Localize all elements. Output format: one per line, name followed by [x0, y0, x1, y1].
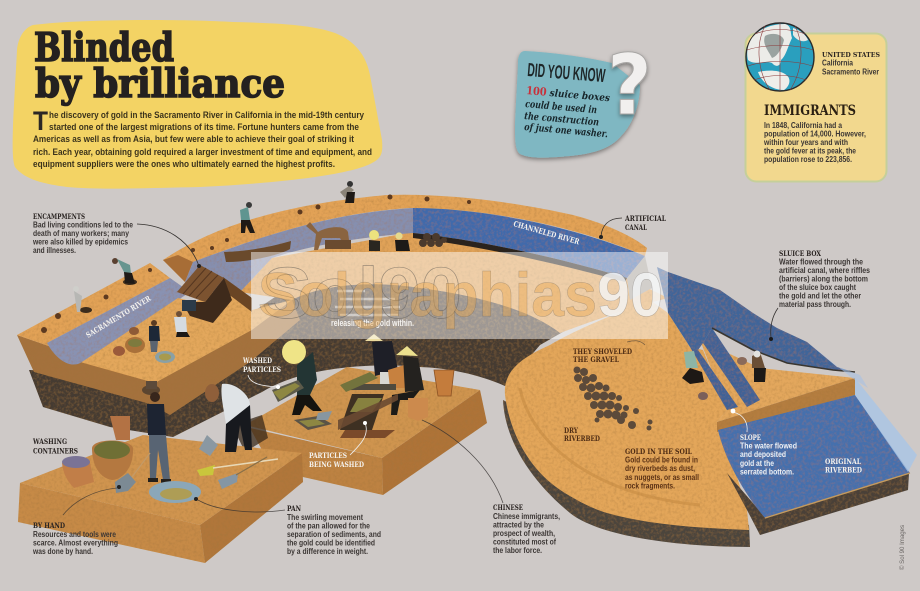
chute two	[690, 347, 738, 410]
canal inner wall	[413, 233, 627, 282]
label: washing containers	[32, 437, 78, 456]
dry riverbed: dark rim	[503, 400, 750, 547]
label: sluice box	[769, 249, 870, 341]
figure: seated Chinese man and stool	[365, 334, 428, 421]
clay pot	[92, 440, 133, 480]
front left block	[18, 435, 303, 563]
pale water wall	[855, 378, 917, 472]
fact text: 100 sluice boxes	[526, 84, 611, 104]
back bank	[163, 195, 647, 282]
label: by hand: scarce. Almost everything	[33, 538, 118, 548]
title: Blinded	[34, 25, 174, 71]
label: sluice box: Water flowed through the	[779, 256, 863, 266]
intro text: Americas as well as from Asia, but few were able to achieve their goal of striking it	[33, 134, 355, 145]
yellow shovel	[197, 465, 215, 476]
scene: hut	[177, 265, 232, 323]
label: Chinese: constituted most of	[493, 536, 556, 546]
label: dry riverbed	[564, 426, 600, 443]
label: encampments	[32, 212, 201, 268]
body text: population of 14,000. However,	[764, 128, 866, 138]
center block	[245, 367, 487, 495]
label: Chinese: prospect of wealth,	[493, 528, 555, 538]
filled logotype: Solgraphias90	[258, 261, 663, 330]
label: slope: gold at the	[740, 458, 774, 468]
label: artificial canal: CANAL	[625, 223, 648, 232]
label: dry riverbed: DRY	[564, 426, 579, 435]
original riverbed water	[718, 395, 910, 518]
label: sluice box: (barriers) along the bottom	[779, 274, 868, 284]
panel: title and introduction	[13, 20, 382, 189]
shovel head	[115, 473, 136, 493]
label: gold in the soil: rock fragments.	[625, 480, 675, 490]
label: slope: serrated bottom.	[740, 466, 794, 476]
chute one	[703, 328, 760, 407]
label: washing containers: CONTAINERS	[33, 446, 78, 456]
label: they shoveled the gravel: THE GRAVEL	[573, 355, 620, 364]
label: pan	[194, 497, 381, 556]
worker at lower terrace	[149, 311, 190, 352]
label: pan: of the pan allowed for the	[287, 520, 370, 530]
label: by hand	[32, 485, 121, 556]
bank front edge	[163, 255, 193, 282]
heading: DID YOU KNOW	[527, 60, 606, 87]
label: washed particles: PARTICLES	[243, 365, 281, 374]
bank stones	[41, 194, 471, 333]
figure: wooden bucket	[434, 370, 454, 396]
label: Sacramento River: SACRAMENTO RIVER	[84, 294, 153, 340]
dry riverbed: top surface	[505, 300, 749, 530]
fact text: could be used in	[525, 99, 597, 116]
scene: workers on upper arc	[41, 181, 471, 333]
label: particles being washed	[309, 421, 367, 469]
label: gold in the soil: GOLD IN THE SOIL	[625, 447, 693, 456]
location labels	[822, 51, 880, 76]
scene: horse	[306, 222, 351, 250]
label: by hand: BY HAND	[33, 521, 65, 530]
location labels: Sacramento River	[822, 66, 880, 76]
worker with shovel far left	[73, 286, 92, 313]
label: encampments: ENCAMPMENTS	[33, 212, 85, 221]
intro text: rich. Each year, obtaining gold required a larger investment of time and equipment, and	[33, 147, 372, 158]
canal end wedge	[627, 256, 652, 300]
label: they shoveled the gravel: THEY SHOVELED	[573, 347, 632, 356]
icon: globe	[746, 23, 814, 91]
yellow title blob	[13, 20, 382, 189]
label: channeled river: CHANNELED RIVER	[512, 219, 581, 246]
sluice box	[657, 267, 853, 410]
worker bending	[112, 258, 137, 285]
label: Chinese: CHINESE	[493, 503, 523, 512]
panel: immigrants	[746, 23, 886, 182]
washing sluice	[338, 372, 398, 438]
label: artificial canal	[599, 214, 667, 239]
bucket	[62, 457, 94, 488]
intro text: T	[33, 106, 48, 136]
label: Chinese	[422, 420, 560, 555]
soil: brown upper stratum	[17, 300, 300, 415]
label: sluice box: of the sluice box caught	[779, 282, 856, 292]
dry riverbed: inner terrace line	[520, 388, 700, 505]
rock pile by canal	[419, 233, 447, 247]
label: gold in the soil: dry riverbeds as dust,	[625, 463, 695, 473]
intro text: started one of the largest migrations of its time. Fortune hunters came from the	[49, 122, 359, 133]
fact text: the construction	[524, 111, 599, 129]
rock pile	[574, 366, 652, 430]
figure: workers at sluice chutes	[682, 350, 766, 400]
label: they shoveled the gravel	[573, 341, 645, 364]
label: by hand: was done by hand.	[32, 546, 93, 556]
card	[746, 34, 886, 182]
pale old river	[185, 208, 413, 292]
label: slope	[731, 409, 797, 476]
label: Chinese: Chinese immigrants,	[493, 511, 560, 521]
fact text	[524, 84, 611, 140]
gold pan	[149, 481, 201, 503]
gray shovel	[218, 473, 238, 489]
label: pan: the gold could be identified	[287, 538, 375, 548]
soil: dark inner face of arc	[29, 275, 575, 437]
label: encampments: Bad living conditions led to the	[33, 220, 133, 230]
label: pan: separation of sediments, and	[287, 529, 381, 539]
label: encampments: and illnesses.	[33, 245, 76, 255]
label: pan: by a difference in weight.	[287, 546, 368, 556]
body text: the gold fever at its peak, the	[764, 146, 856, 156]
right orange platform	[700, 340, 855, 422]
title: by brilliance	[35, 61, 285, 107]
location labels: California	[822, 58, 853, 68]
gold tray	[294, 411, 332, 430]
falling water sheet	[807, 342, 868, 388]
panel: did you know	[515, 36, 652, 158]
label: particles being washed: BEING WASHED	[309, 460, 364, 469]
shadow under worker	[232, 415, 268, 452]
label: artificial canal: ARTIFICIAL	[624, 214, 667, 223]
label: washed particles	[242, 356, 281, 389]
label: sluice box: artificial canal, where riffles	[779, 265, 870, 275]
inner-face text: releasing the gold within.	[331, 318, 414, 328]
worker upper bank	[240, 202, 255, 233]
fact text: of just one washer.	[524, 122, 608, 140]
label: original riverbed	[825, 457, 862, 474]
scene: boat	[224, 241, 291, 262]
diagram: river cross-section	[17, 181, 917, 570]
question mark: ?	[607, 36, 652, 134]
label: original riverbed: RIVERBED	[825, 466, 862, 474]
channeled river	[413, 208, 645, 278]
body text: In 1848, California had a	[764, 120, 842, 130]
label: gold in the soil	[625, 447, 699, 490]
step shadow	[223, 277, 252, 312]
label: washed particles: WASHED	[242, 356, 272, 365]
intro text	[33, 106, 372, 170]
label: dry riverbed: RIVERBED	[564, 434, 600, 443]
watermark	[251, 252, 668, 339]
label: encampments: death of many workers; many	[33, 228, 129, 238]
original riverbed soil	[727, 473, 909, 535]
label: encampments: were also killed by epidemics	[32, 236, 128, 246]
blue callout shape	[515, 51, 640, 158]
label: slope: The water flowed	[740, 440, 797, 450]
label: sluice box: SLUICE BOX	[779, 249, 821, 258]
label: slope: SLOPE	[740, 433, 761, 442]
worker carrying box	[340, 181, 355, 203]
workers by horse	[369, 230, 410, 251]
body text: population rose to 223,856.	[764, 154, 852, 164]
riverbed lower edge	[765, 473, 910, 518]
left terrace	[82, 287, 292, 383]
pots and pans on terrace	[113, 327, 175, 363]
title	[34, 25, 285, 107]
location labels: UNITED STATES	[822, 51, 880, 59]
washed particles tray	[273, 383, 300, 400]
body text: within four years and with	[763, 137, 848, 147]
outlined logotype: Sol90	[262, 254, 462, 334]
washing containers and tools	[62, 416, 278, 503]
sluice rail	[712, 328, 855, 372]
label: washing containers: WASHING	[32, 437, 67, 446]
label: particles being washed: PARTICLES	[309, 451, 347, 460]
label: pan: PAN	[287, 504, 301, 513]
intro text: he discovery of gold in the Sacramento River in California in the mid-19th century	[49, 110, 365, 121]
label: Chinese: the labor force.	[493, 545, 542, 555]
label: by hand: Resources and tools were	[33, 529, 116, 539]
figure: prospector with hat	[142, 381, 171, 483]
label: sluice box: material pass through.	[779, 299, 851, 309]
platform face	[717, 378, 855, 432]
body text	[763, 120, 866, 164]
figure: man with yellow conical hat	[272, 340, 322, 415]
back bank, left section	[17, 263, 170, 383]
copyright: © Sol 90 Images	[898, 525, 906, 570]
heading: IMMIGRANTS	[764, 103, 856, 119]
label: gold in the soil: Gold could be found in	[625, 454, 698, 464]
small bucket	[110, 416, 130, 440]
inner-face text	[331, 291, 414, 328]
label: original riverbed: ORIGINAL	[825, 457, 862, 466]
label: pan: The swirling movement	[287, 512, 363, 522]
label: Chinese: attracted by the	[493, 520, 544, 530]
label: gold in the soil: as nuggets, or as small	[625, 472, 699, 482]
label: slope: and deposited	[740, 449, 786, 459]
Sacramento River water	[47, 278, 190, 365]
intro text: equipment suppliers were the ones who ultimately earned the highest profits.	[33, 159, 335, 170]
figure: bent worker in white shirt	[199, 384, 252, 456]
label: sluice box: the gold and let the other	[779, 290, 862, 300]
arc inner terrace	[240, 232, 668, 333]
